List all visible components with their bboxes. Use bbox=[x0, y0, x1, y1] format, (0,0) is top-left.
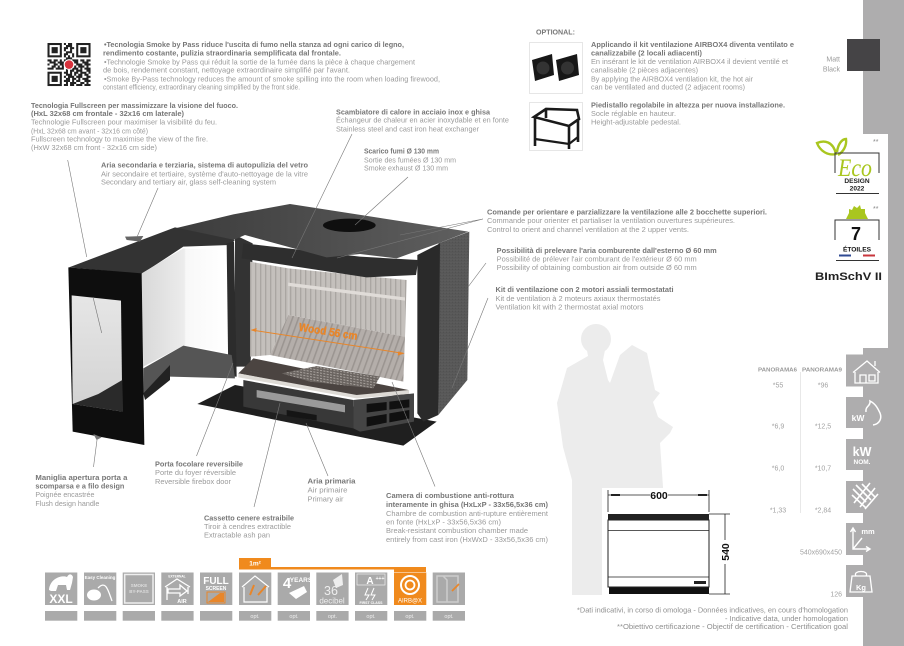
footnotes: *Dati indicativi, in corso di omologa - Données indicatives, en cours d'homologation bbox=[577, 608, 848, 614]
text block: ventilation kit: Kit de ventilation à 2 moteurs axiaux thermostatés bbox=[496, 294, 661, 303]
footnotes: **Obiettivo certificazione - Objectif de certification - Certification goal bbox=[617, 624, 848, 631]
text block: controls bbox=[487, 208, 767, 234]
option bars row: opt. bbox=[250, 614, 260, 620]
text block: fullscreen: (HxW 32x68 cm front - 32x16 cm side) bbox=[31, 143, 157, 152]
badge: BImSchV II: BImSchV II bbox=[815, 271, 882, 283]
feature icon: A+++ first class: A bbox=[366, 576, 374, 587]
badge: eco design 2022 bbox=[817, 139, 879, 194]
left front column bbox=[235, 235, 253, 367]
wood length arrow bbox=[251, 322, 405, 356]
specifications table bbox=[758, 368, 842, 598]
feature icon: 4 years: 4 bbox=[283, 575, 292, 592]
text block: controls: Control to orient and channel ventilation at the 2 upper vents. bbox=[487, 225, 689, 234]
text block: airbox option: En insérant le kit de ventilation AIRBOX4 il devient ventilé et bbox=[591, 57, 788, 66]
text block: secondary air: Secondary and tertiary air, glass self-cleaning system bbox=[101, 178, 276, 187]
text block: pedestal option: Piedistallo regolabile in altezza per nuova installazione. bbox=[591, 101, 785, 110]
optional pedestal image bbox=[530, 102, 582, 150]
specifications table: *55 bbox=[773, 382, 783, 390]
firebox floor bbox=[238, 358, 408, 397]
text block: primary air bbox=[308, 476, 357, 503]
feature icon: easy cleaning bbox=[84, 572, 116, 605]
flue collar bbox=[323, 219, 376, 232]
text block: heat exchanger: Scambiatore di calore in acciaio inox e ghisa bbox=[336, 107, 491, 116]
side icon: weight: Kg bbox=[856, 583, 866, 592]
text block: primary air: Air primaire bbox=[308, 486, 348, 494]
feature icon: A+++ first class: +++ bbox=[376, 576, 384, 582]
feature icon: airbox bbox=[394, 572, 426, 605]
side icon: kW flame bbox=[846, 397, 881, 428]
text block: smoke by pass: rendimento costante, pulizia straordinaria semplificata dal frontale. bbox=[103, 48, 341, 58]
badge: 7 etoiles bbox=[835, 205, 879, 260]
text block: ash pan: Extractable ash pan bbox=[204, 531, 270, 540]
text block: firebox door: Porta focolare reversibile bbox=[155, 459, 243, 468]
feature icon: smoke by-pass bbox=[123, 572, 155, 605]
top plate bbox=[175, 204, 468, 258]
text block: smoke exhaust bbox=[364, 147, 456, 173]
colour swatch: matt black bbox=[823, 39, 880, 74]
text block: handle: Poignée encastrée bbox=[35, 490, 94, 499]
orange airbox bracket: 1m² bbox=[249, 560, 262, 568]
human silhouette for scale bbox=[557, 324, 673, 595]
text block: primary air: Primary air bbox=[308, 494, 344, 503]
text block: smoke exhaust: Smoke exhaust Ø 130 mm bbox=[364, 164, 448, 173]
badge: 7 etoiles: 7 bbox=[851, 224, 861, 244]
side icon: wood logs bbox=[846, 481, 878, 513]
text block: smoke by pass bbox=[103, 40, 440, 92]
text block: airbox option: canalisable (2 pièces adjacentes) bbox=[591, 66, 698, 75]
footnotes: - Indicative data, under homologation bbox=[725, 616, 848, 623]
specifications table: *12,5 bbox=[815, 424, 831, 430]
feature icon: full screen: FULL bbox=[203, 576, 229, 587]
feature icon: external air: AIR bbox=[177, 599, 187, 605]
leader lines bbox=[68, 134, 488, 507]
text block: smoke by pass: •Smoke By-Pass technology reduces the amount of smoke spilling into the room when loading firewood, bbox=[104, 74, 440, 83]
text block: firebox door: Porte du foyer réversible bbox=[155, 468, 236, 477]
firebox walls bbox=[250, 262, 288, 357]
side icon: kW nominal: NOM. bbox=[854, 459, 871, 466]
right vents bbox=[353, 393, 414, 432]
text block: heat exchanger bbox=[336, 107, 509, 133]
text block: smoke by pass: de bois, rendement constant, nettoyage extraordinaire simplifié par l'avant. bbox=[103, 66, 350, 74]
feature icon: smoke by-pass: SMOKE bbox=[131, 583, 147, 588]
colour swatch: matt black: Matt bbox=[826, 56, 840, 64]
feature icon: external air bbox=[161, 572, 194, 605]
option bars row: opt. bbox=[328, 614, 338, 620]
text block: smoke exhaust: Scarico fumi Ø 130 mm bbox=[364, 147, 439, 156]
optional heading: OPTIONAL: bbox=[536, 28, 575, 36]
feature icon: full screen bbox=[200, 572, 232, 605]
text block: combustion chamber: Camera di combustione anti-rottura bbox=[386, 491, 515, 500]
specifications table: *6,0 bbox=[772, 466, 784, 472]
specifications table: *10,7 bbox=[815, 466, 831, 472]
feature icon: smoke by-pass: BY-PASS bbox=[129, 589, 149, 594]
hood bbox=[242, 243, 418, 277]
feature icon: easy cleaning: Easy Cleaning bbox=[85, 575, 116, 580]
text block: heat exchanger: Stainless steel and cast iron heat exchanger bbox=[336, 124, 480, 133]
orange airbox bracket bbox=[239, 558, 426, 572]
text block: controls: Comande per orientare e parzializzare la ventilazione alle 2 bocchette superiori. bbox=[487, 208, 767, 216]
option bars row: opt. bbox=[366, 614, 376, 620]
right side panel bbox=[438, 232, 469, 415]
door side glass bbox=[142, 248, 227, 367]
side icon: weight bbox=[846, 565, 872, 597]
text block: combustion chamber: interamente in ghisa (HxLxP - 33x56,5x36 cm) bbox=[386, 500, 549, 509]
text block: fullscreen: Fullscreen technology to maximise the view of the fire. bbox=[31, 135, 208, 144]
side icon: dimensions bbox=[846, 523, 875, 555]
feature icon: XXL: XXL bbox=[49, 592, 73, 606]
text block: combustion chamber: Chambre de combustion anti-rupture entièrement bbox=[386, 509, 548, 518]
text block: secondary air bbox=[101, 161, 309, 187]
text block: airbox option: canalizzabile (2 locali adiacenti) bbox=[591, 48, 703, 57]
top handle bbox=[125, 236, 143, 242]
option bars row: opt. bbox=[405, 614, 415, 620]
feature icon: XXL bbox=[45, 572, 77, 606]
badge: eco design 2022: ** bbox=[873, 139, 879, 146]
text block: fullscreen: Technologie Fullscreen pour maximiser la visibilité du feu. bbox=[31, 118, 217, 127]
technical drawing: 600 bbox=[650, 490, 668, 502]
side icon: kW nominal bbox=[846, 439, 872, 470]
text block: fullscreen bbox=[31, 101, 238, 152]
text block: ventilation kit bbox=[496, 285, 674, 312]
ash section bbox=[243, 380, 353, 428]
feature icon: 36 decibel: decibel bbox=[319, 596, 345, 606]
text block: combustion chamber: en fonte (HxLxP - 33x56,5x36 cm) bbox=[386, 517, 501, 526]
stove illustration bbox=[68, 204, 469, 446]
text block: controls: Commande pour orienter et partialiser la ventilation ouvertures supérieures. bbox=[487, 216, 735, 225]
specifications table: 126 bbox=[830, 592, 842, 598]
feature icon: ventilated room bbox=[239, 572, 271, 605]
optional fan kit image bbox=[530, 42, 582, 94]
feature icon: door bbox=[433, 572, 465, 605]
feature icon: full screen: SCREEN bbox=[206, 586, 227, 592]
text block: handle: Maniglia apertura porta a bbox=[35, 473, 128, 482]
text block: combustion chamber bbox=[386, 491, 549, 544]
specifications table: PANORAMA6 bbox=[758, 368, 797, 374]
door handle bbox=[93, 434, 102, 440]
wood length arrow: Wood 56 cm bbox=[298, 322, 358, 343]
text block: primary air: Aria primaria bbox=[308, 476, 357, 486]
feature icon: 36 decibel: 36 bbox=[324, 584, 338, 598]
specifications table: *2,84 bbox=[815, 508, 831, 514]
base plate bbox=[197, 385, 437, 446]
feature icon: airbox: AIRB@X bbox=[398, 598, 422, 604]
footnotes bbox=[577, 608, 848, 631]
option bars row: opt. bbox=[289, 614, 299, 620]
feature icon: A+++ first class bbox=[355, 572, 387, 605]
text block: fullscreen: Tecnologia Fullscreen per massimizzare la visione del fuoco. bbox=[31, 101, 238, 110]
door upper frame bbox=[69, 227, 235, 274]
text block: handle: Flush design handle bbox=[35, 499, 99, 508]
text block: outside air: Possibility of obtaining combustion air from outside Ø 60 mm bbox=[497, 263, 697, 272]
text block: outside air: Possibilité de prélever l'air comburant de l'extérieur Ø 60 mm bbox=[497, 254, 697, 264]
specifications table: *1,33 bbox=[770, 508, 786, 514]
specifications table: 540x690x450 bbox=[800, 550, 842, 556]
text block: airbox option bbox=[591, 40, 794, 92]
technical drawing bbox=[602, 488, 732, 596]
text block: pedestal option bbox=[591, 101, 785, 127]
text block: combustion chamber: Break-resistant combustion chamber made bbox=[386, 526, 528, 535]
qr code bbox=[48, 44, 91, 85]
text block: fullscreen: (HxL 32x68 cm avant - 32x16 cm côté) bbox=[31, 126, 148, 135]
badge: eco design 2022: DESIGN bbox=[844, 178, 870, 185]
feature icon: 4 years: YEARS bbox=[290, 577, 313, 584]
side icon: kW nominal: kW bbox=[853, 445, 872, 459]
side icon: kW flame: kW bbox=[852, 413, 865, 423]
text block: ash pan: Tiroir à cendres extractible bbox=[204, 522, 291, 531]
feature icon: A+++ first class: FIRST CLASS bbox=[360, 601, 383, 605]
text block: heat exchanger: Échangeur de chaleur en acier inoxydable et en fonte bbox=[336, 116, 509, 125]
text block: ventilation kit: Ventilation kit with 2 thermostat axial motors bbox=[496, 302, 644, 312]
text block: ash pan: Cassetto cenere estraibile bbox=[204, 513, 294, 522]
option bars row bbox=[45, 611, 465, 621]
specifications table: PANORAMA9 bbox=[802, 368, 842, 374]
feature icon: external air: EXTERNAL bbox=[168, 574, 186, 578]
colour swatch: matt black: Black bbox=[823, 66, 840, 74]
text block: outside air bbox=[497, 246, 717, 272]
specifications table: *6,9 bbox=[772, 424, 784, 430]
text block: secondary air: Aria secondaria e terziaria, sistema di autopulizia del vetro bbox=[101, 161, 309, 170]
badge: 7 etoiles: ** bbox=[873, 206, 879, 213]
badge: eco design 2022: 2022 bbox=[850, 186, 865, 192]
feature icon: 36 decibel bbox=[316, 572, 349, 606]
text block: airbox option: Applicando il kit ventilazione AIRBOX4 diventa ventilato e bbox=[591, 40, 794, 49]
option bars row: opt. bbox=[444, 614, 454, 620]
side icon: house bbox=[846, 354, 880, 386]
specifications table: *96 bbox=[818, 382, 828, 390]
text block: smoke exhaust: Sortie des fumées Ø 130 mm bbox=[364, 155, 456, 164]
door lower frame bbox=[143, 346, 235, 393]
badge: 7 etoiles: ÉTOILES bbox=[843, 244, 872, 254]
text block: ash pan bbox=[204, 513, 294, 540]
text block: firebox door bbox=[155, 459, 243, 486]
text block: secondary air: Air secondaire et tertiaire, système d'auto-nettoyage de la vitre bbox=[101, 169, 308, 178]
badge: eco design 2022: Eco bbox=[837, 155, 872, 182]
text block: handle: scomparsa e a filo design bbox=[35, 482, 124, 491]
text block: airbox option: can be ventilated and ducted (2 adjacent rooms) bbox=[591, 83, 745, 92]
right front column bbox=[417, 243, 440, 422]
right grey side band bbox=[863, 0, 904, 646]
text block: smoke by pass: constant efficiency, extraordinary cleaning simplified by the front side. bbox=[103, 82, 300, 92]
text block: smoke by pass: •Tecnologia Smoke by Pass riduce l'uscita di fumo nella stanza ad ogni carico di legno, bbox=[104, 40, 404, 49]
text block: smoke by pass: •Technologie Smoke by Pass qui réduit la sortie de la fumée dans la pièce à chaque chargement bbox=[104, 58, 415, 66]
text block: airbox option: By applying the AIRBOX4 ventilation kit, the hot air bbox=[591, 74, 754, 83]
text block: combustion chamber: entirely from cast iron (HxWxD - 33x56,5x36 cm) bbox=[386, 535, 548, 544]
text block: ventilation kit: Kit di ventilazione con 2 motori assiali termostatati bbox=[496, 285, 674, 294]
door front bbox=[68, 267, 144, 445]
text block: firebox door: Reversible firebox door bbox=[155, 477, 232, 486]
technical drawing: 540 bbox=[720, 543, 732, 561]
text block: pedestal option: Socle réglable en hauteur. bbox=[591, 109, 676, 118]
text block: fullscreen: (HxL 32x68 cm frontale - 32x16 cm laterale) bbox=[31, 109, 185, 118]
text block: outside air: Possibilità di prelevare l'aria comburente dall'esterno Ø 60 mm bbox=[497, 246, 717, 255]
feature icon: 4 years bbox=[278, 572, 313, 605]
side icon: dimensions: mm bbox=[861, 527, 875, 536]
text block: handle bbox=[35, 473, 128, 508]
text block: pedestal option: Height-adjustable pedestal. bbox=[591, 118, 681, 127]
